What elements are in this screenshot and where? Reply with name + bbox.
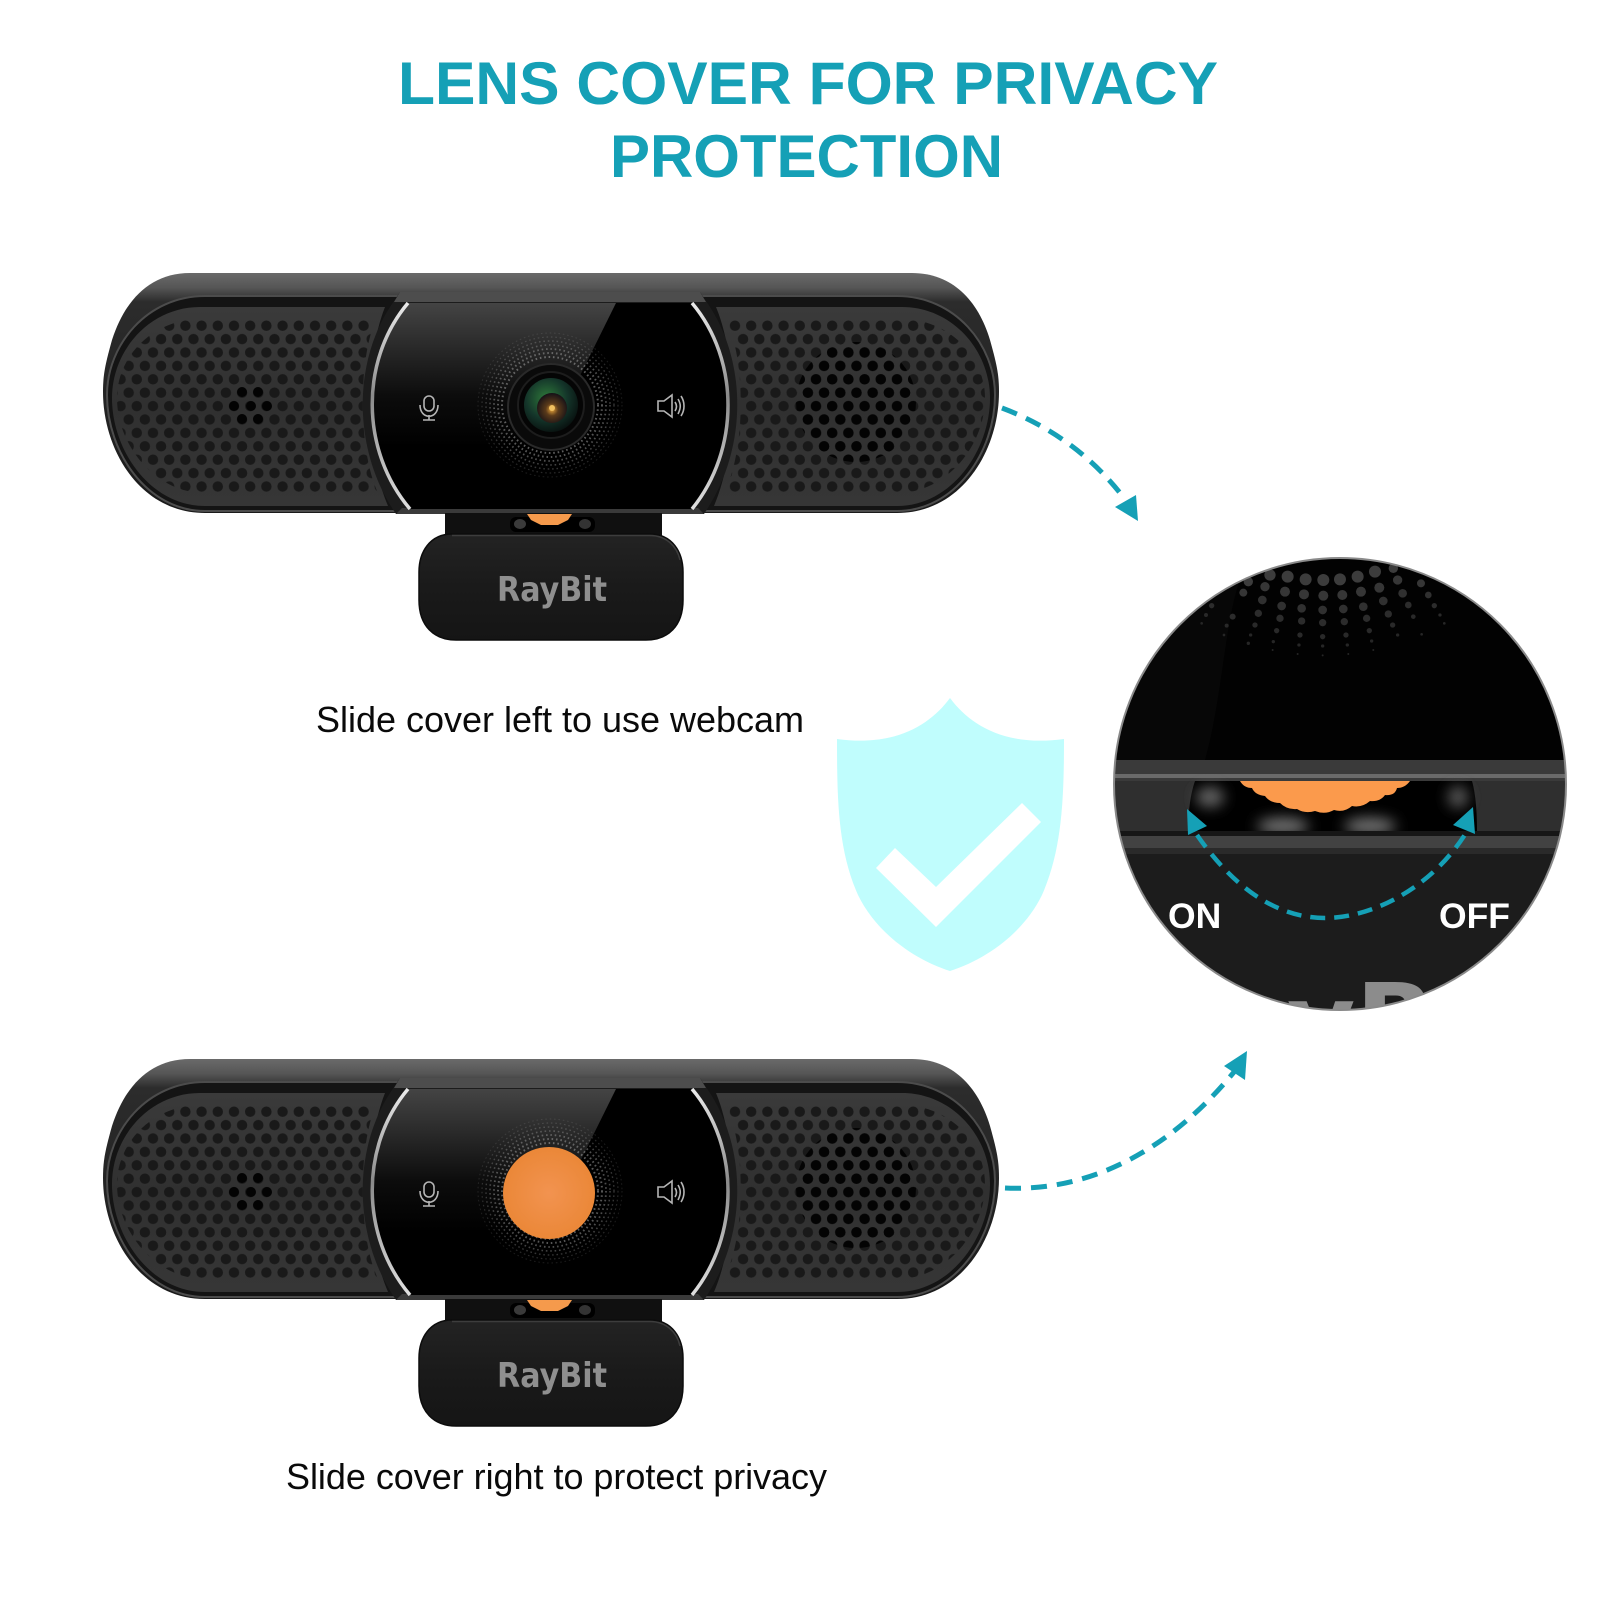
arrow: top camera to detail	[1002, 408, 1138, 521]
orange lens cover	[503, 1147, 595, 1239]
caption: covered: Slide cover right to protect privacy	[286, 1456, 827, 1497]
title: PROTECTION	[610, 123, 1003, 190]
caption: open: Slide cover left to use webcam	[316, 699, 804, 740]
cropped logo letters: yB	[1287, 962, 1435, 1084]
icon: speaker	[658, 395, 684, 417]
halftone dots	[1200, 564, 1446, 656]
lens	[508, 364, 594, 450]
icon: shield with check	[837, 698, 1064, 971]
stand clip	[419, 1320, 683, 1426]
webcam with lens covered	[103, 1059, 999, 1426]
lens housing	[363, 1078, 737, 1300]
label: on: ON	[1168, 896, 1221, 936]
icon: speaker	[658, 1181, 684, 1203]
dotted ring around lens	[478, 333, 622, 477]
stand hinge	[445, 1299, 662, 1327]
left speaker grille	[112, 1093, 388, 1292]
stand clip: RayBit	[497, 570, 607, 610]
title	[398, 50, 1218, 190]
stand clip	[419, 534, 683, 640]
left speaker grille	[112, 307, 388, 506]
webcam with lens open	[103, 273, 999, 640]
label: off: OFF	[1439, 896, 1510, 936]
stand clip: RayBit	[497, 1356, 607, 1396]
housing bands	[1110, 760, 1570, 781]
right speaker grille	[714, 307, 990, 506]
right speaker grille	[714, 1093, 990, 1292]
panel: zoomed detail circle	[1113, 557, 1567, 1011]
camera body	[103, 273, 999, 513]
stand hinge	[445, 513, 662, 541]
icon: microphone	[420, 1182, 438, 1206]
double arrow: on/off	[1187, 807, 1475, 918]
arrow: bottom camera to detail	[1005, 1051, 1247, 1188]
orange slider wheel	[1240, 781, 1410, 813]
camera body	[103, 1059, 999, 1299]
lens housing	[363, 292, 737, 514]
title: LENS COVER FOR PRIVACY	[398, 50, 1218, 117]
hinge slot	[1188, 781, 1477, 831]
icon: microphone	[420, 396, 438, 420]
dotted ring around cover	[478, 1119, 622, 1263]
